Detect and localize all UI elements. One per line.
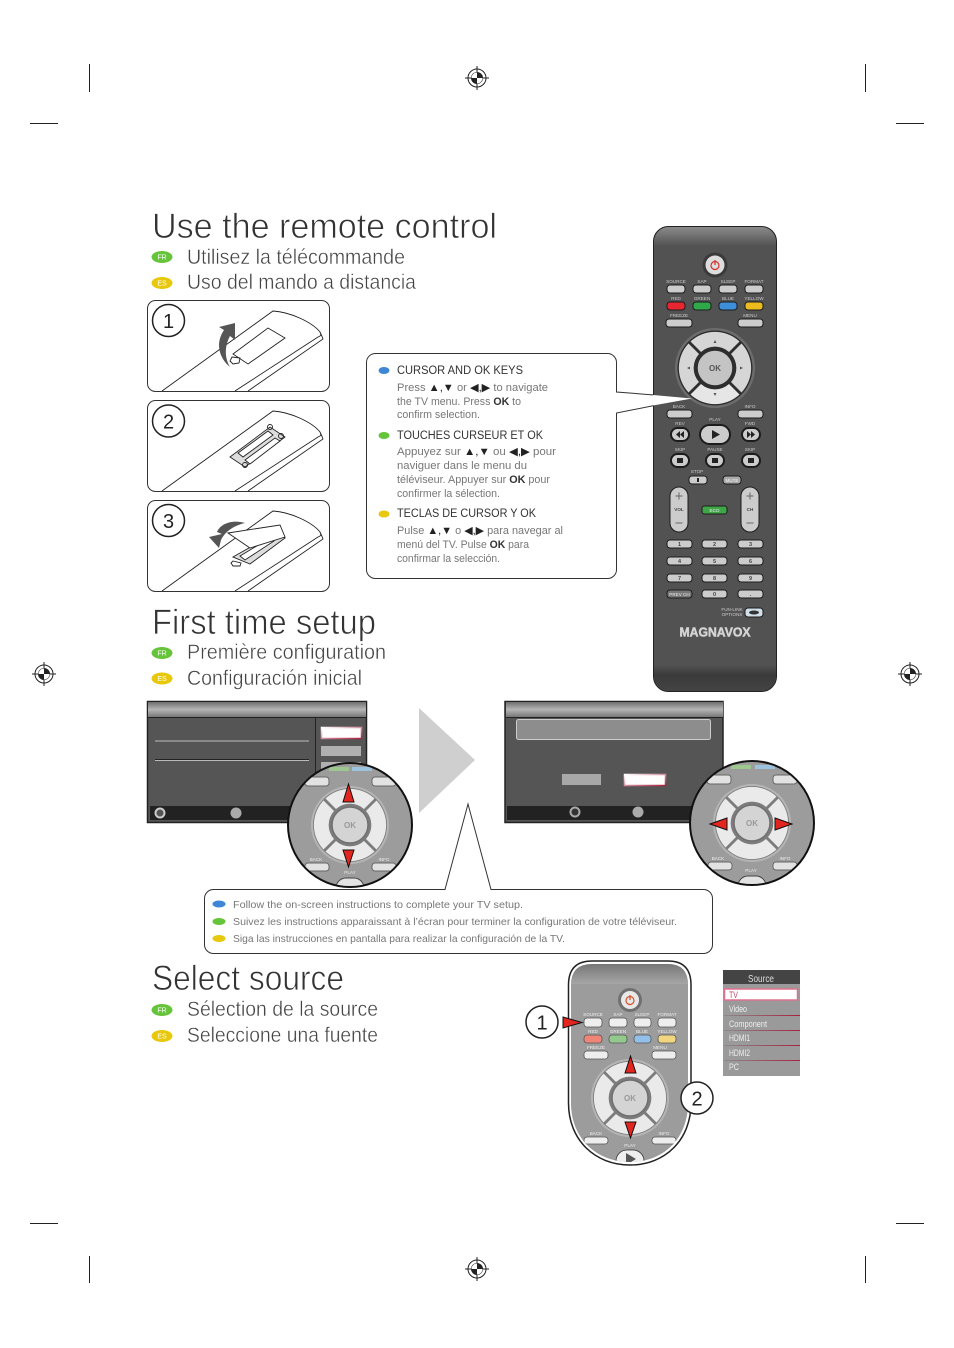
registration mark: left: [32, 662, 56, 686]
top button labels: BLUE: [722, 296, 734, 301]
source menu: HDMI1: [729, 1033, 750, 1043]
step number 2: [681, 1082, 713, 1114]
heading: select source: Select source: [152, 959, 344, 998]
heading: first time setup: Première configuration: [187, 641, 386, 664]
heading: select source: [152, 959, 378, 1047]
callout pointer over remote: [653, 395, 692, 406]
ES badge: ES: [157, 676, 167, 683]
remote control: [654, 226, 776, 692]
heading: first time setup: First time setup: [152, 603, 376, 642]
step number 1: [526, 1006, 558, 1038]
top button labels: SLEEP: [721, 279, 735, 284]
transport labels: BACK: [673, 404, 686, 409]
no button: [562, 774, 601, 785]
magnified remote: up and down keys: BACK: [310, 857, 323, 862]
ES badge: ES: [157, 280, 167, 288]
step number 1: [152, 304, 184, 336]
magnified remote: up and down keys: PLAY: [344, 870, 356, 875]
english text: [378, 365, 548, 421]
yes button: [624, 774, 666, 786]
magnified remote: left and right keys: INFO: [780, 856, 791, 861]
magnified remote: left and right keys: BACK: [712, 856, 725, 861]
source menu: Component: [729, 1019, 767, 1029]
transport labels: INFO: [745, 404, 756, 409]
top button labels: MENU: [743, 313, 757, 318]
ES badge: ES: [157, 1034, 167, 1040]
registration mark: bottom: [465, 1257, 489, 1281]
magnified remote: up and down keys: INFO: [379, 857, 390, 862]
cursor pad: [675, 328, 755, 408]
magnified remote: left and right keys: [690, 761, 814, 896]
panel: step 3 close cover: [148, 500, 330, 592]
fun-link button: OPTIONS: [722, 612, 742, 617]
panel: step 1 open battery cover: [148, 300, 330, 392]
remote detail: select source: MENU: [653, 1045, 667, 1050]
remote detail: select source: OK: [624, 1094, 636, 1103]
english text: the TV menu. Press OK to: [397, 396, 521, 408]
FR badge: FR: [157, 1008, 167, 1014]
magnified remote: left and right keys: OK: [746, 819, 758, 828]
number keys: 4: [678, 559, 682, 565]
transport labels: SKIP: [675, 447, 685, 452]
ES badge: [152, 277, 172, 289]
french text: Appuyez sur ▲,▼ ou ◀,▶ pour: [397, 446, 556, 458]
transport labels: FWD: [745, 421, 756, 426]
TV screen 1: [148, 702, 366, 822]
remote detail: select source: FREEZE: [587, 1045, 605, 1050]
magnified remote: up and down keys: [288, 763, 412, 898]
top button rows: [666, 285, 763, 327]
FR badge: [152, 1004, 172, 1016]
transport labels: STOP: [691, 469, 703, 474]
remote detail: select source: YELLOW: [657, 1029, 677, 1034]
callout: setup instructions: Siga las instrucciones en pantalla para realizar la configuración de la TV.: [233, 933, 565, 945]
red arrows: [710, 818, 792, 830]
transport labels: MUTE: [725, 478, 739, 483]
ES badge: [152, 672, 172, 684]
heading: select source: Seleccione una fuente: [187, 1024, 378, 1047]
magnified remote: up and down keys: OK: [344, 821, 356, 830]
transport labels: PLAY: [709, 417, 721, 422]
remote detail: select source: INFO: [659, 1131, 670, 1136]
top button labels: YELLOW: [744, 296, 764, 301]
french text: confirmer la sélection.: [397, 488, 500, 500]
heading: first time setup: [152, 603, 386, 690]
remote detail: select source: SAP: [613, 1012, 623, 1017]
top button labels: SAP: [697, 279, 707, 284]
transport labels: REV: [675, 421, 686, 426]
transport buttons: [667, 410, 763, 484]
heading: use the remote control: Use the remote control: [152, 207, 497, 246]
FR badge: FR: [157, 254, 167, 262]
brand logo: MAGNAVOX: [680, 624, 751, 640]
callout: cursor and OK keys: [366, 353, 692, 579]
remote detail: select source: BLUE: [636, 1029, 648, 1034]
remote outline with cover closing: [162, 511, 323, 591]
top button labels: RED: [671, 296, 682, 301]
number keys: 2: [713, 542, 716, 548]
top button labels: FORMAT: [744, 279, 764, 284]
source menu: Source: [748, 974, 774, 985]
spanish text: confirmar la selección.: [397, 553, 500, 565]
remote detail: select source: BACK: [590, 1131, 603, 1136]
french text: naviguer dans le menu du: [397, 460, 527, 472]
number keys: .: [750, 592, 752, 598]
number keys: 6: [749, 559, 752, 565]
french text: [378, 430, 556, 500]
transport glyphs: [676, 430, 755, 482]
number keys: 1: [678, 542, 681, 548]
arrow: next step: [419, 708, 475, 813]
number keys: 9: [749, 576, 752, 582]
source menu: [723, 970, 800, 1076]
source menu: HDMI2: [729, 1048, 750, 1058]
step number 2: 2: [163, 412, 174, 434]
fun-link button: [721, 607, 763, 617]
arrow: lift cover: [219, 323, 235, 367]
heading: use the remote control: Uso del mando a distancia: [187, 271, 416, 294]
transport labels: PAUSE: [707, 447, 723, 452]
step number 2: [152, 405, 184, 437]
step number 1: 1: [163, 311, 174, 333]
english text: Press ▲,▼ or ◀,▶ to navigate: [397, 382, 548, 394]
number keys: PREV CH: [669, 592, 690, 597]
red arrows: [343, 784, 354, 867]
top button labels: FREEZE: [670, 313, 688, 318]
red arrows: [563, 1017, 636, 1138]
ES badge: [152, 1030, 172, 1042]
magnified remote: left and right keys: PLAY: [745, 868, 757, 873]
remote outline with batteries: [162, 411, 323, 491]
spanish text: menú del TV. Pulse OK para: [397, 539, 530, 551]
message box: [516, 720, 710, 740]
TV screen 2: [505, 702, 723, 822]
callout: setup instructions: [204, 804, 713, 954]
heading: use the remote control: [152, 207, 497, 294]
footer bar: [150, 806, 366, 820]
spanish text: Pulse ▲,▼ o ◀,▶ para navegar al: [397, 525, 563, 537]
number keys: 7: [678, 576, 681, 582]
callout: setup instructions: Suivez les instructions apparaissant à l’écran pour terminer la configuration de votre téléviseur.: [233, 916, 677, 928]
FR badge: [152, 647, 172, 659]
volume and channel rockers: VOL: [674, 507, 684, 512]
selected option: [322, 728, 362, 738]
top button labels: GREEN: [694, 296, 710, 301]
english text: confirm selection.: [397, 409, 480, 421]
volume and channel rockers: [670, 487, 759, 532]
volume and channel rockers: ECO: [710, 508, 720, 513]
source menu: PC: [729, 1062, 739, 1072]
top button labels: SOURCE: [666, 279, 686, 284]
spanish text: [378, 508, 563, 565]
french text: téléviseur. Appuyer sur OK pour: [397, 474, 550, 486]
heading: use the remote control: Utilisez la télécommande: [187, 246, 405, 269]
step number 1: 1: [536, 1012, 548, 1034]
remote outline with cover: [162, 311, 323, 391]
source menu: TV: [729, 990, 738, 1000]
step number 2: 2: [691, 1088, 703, 1110]
number keys: [667, 540, 763, 598]
heading: select source: Sélection de la source: [187, 998, 378, 1021]
other options: [321, 746, 361, 776]
step number 3: [152, 504, 184, 536]
number keys: 8: [713, 576, 716, 582]
source menu: Video: [729, 1004, 747, 1014]
callout: setup instructions: Follow the on-screen instructions to complete your TV setup.: [233, 899, 523, 911]
FR badge: [152, 251, 172, 263]
top button labels: [666, 279, 764, 318]
step number 3: 3: [163, 511, 174, 533]
registration mark: right: [898, 662, 922, 686]
english text: CURSOR AND OK KEYS: [397, 365, 523, 377]
remote detail: select source: SOURCE: [583, 1012, 603, 1017]
number keys: 0: [713, 592, 716, 598]
arrow: close cover: [209, 522, 245, 548]
footer bar: [507, 806, 723, 820]
heading: first time setup: Configuración inicial: [187, 667, 362, 690]
remote detail: select source: PLAY: [624, 1143, 636, 1148]
cursor pad: OK: [709, 364, 721, 373]
spanish text: TECLAS DE CURSOR Y OK: [397, 508, 536, 520]
FR badge: FR: [157, 650, 167, 658]
registration mark: top: [465, 66, 489, 90]
remote detail: select source: GREEN: [610, 1029, 626, 1034]
number keys: 3: [749, 542, 752, 548]
remote detail: select source: [563, 960, 692, 1172]
panel: step 2 insert batteries: [148, 400, 330, 492]
transport labels: SKIP: [745, 447, 755, 452]
transport labels: [673, 404, 756, 483]
power button: [702, 252, 728, 278]
french text: TOUCHES CURSEUR ET OK: [397, 430, 543, 442]
remote detail: select source: SLEEP: [635, 1012, 649, 1017]
remote detail: select source: RED: [588, 1029, 599, 1034]
fun-link button: FUN-LINK: [721, 607, 744, 612]
number keys: 5: [713, 559, 716, 565]
volume and channel rockers: CH: [747, 507, 754, 512]
remote detail: select source: FORMAT: [657, 1012, 677, 1017]
